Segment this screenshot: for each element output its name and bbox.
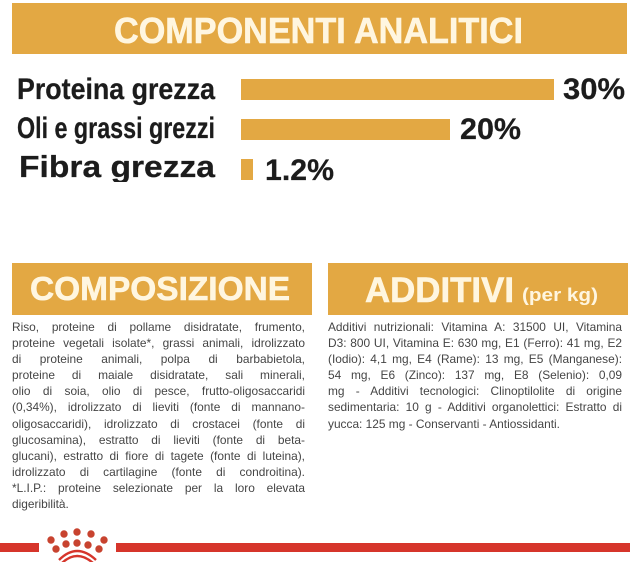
row: fibra grezza: Fibra grezza: [19, 149, 216, 184]
panel: composizione header: [12, 263, 312, 315]
text block: additivi: sedimentaria: 10 g - Additivi organolettici: Estratto di: [328, 400, 622, 414]
text block: composizione: Riso, proteine di pollame disidratate, frumento,: [12, 320, 305, 334]
panel: additivi header: [328, 263, 628, 315]
heading note: per kg: (per kg): [522, 285, 598, 305]
title: componenti analitici: COMPONENTI ANALITICI: [114, 10, 523, 51]
text block: composizione: idrolizzato di cartilagine (fonte di condroitina).: [12, 465, 305, 479]
text block: additivi: (Iodio): 4,1 mg, E4 (Rame): 13 mg, E5 (Manganese):: [328, 352, 622, 366]
text block: additivi: 54 mg, E6 (Zinco): 137 mg, E8 (Selenio): 0,09: [328, 368, 622, 382]
text block: composizione: glucani), estratto di fiore di tagete (fonte di luteina),: [12, 449, 305, 463]
text block: composizione: glucosamina), estratto di lieviti (fonte di beta-: [12, 433, 305, 447]
panel: componenti analitici header: [12, 3, 627, 54]
text block: composizione: [12, 320, 305, 511]
text block: composizione: oligosaccaridi), idrolizzato di crostacei (fonte di: [12, 417, 305, 431]
row: proteina grezza: 30%: [563, 73, 625, 106]
text block: composizione: digeribilità.: [12, 497, 69, 511]
bar chart: analytical components: [17, 73, 625, 187]
text block: additivi: [328, 320, 622, 431]
text block: composizione: proteine vegetali isolate*, grassi animali, idrolizzato: [12, 336, 305, 350]
row: fibra grezza: [21, 154, 334, 182]
row: oli e grassi grezzi: 20%: [460, 113, 521, 146]
row: fibra grezza: 1.2%: [265, 154, 334, 187]
heading: additivi: ADDITIVI: [365, 271, 514, 310]
row: oli e grassi grezzi: [17, 112, 521, 146]
text block: composizione: *L.I.P.: proteine selezionate per la loro elevata: [12, 481, 305, 495]
text block: additivi: Additivi nutrizionali: Vitamina A: 31500 UI, Vitamina: [328, 320, 622, 334]
text block: additivi: mg - Additivi tecnologici: Clinoptilolite di origine: [328, 384, 622, 398]
row: oli e grassi grezzi: Oli e grassi grezzi: [17, 112, 215, 145]
text block: additivi: D3: 800 UI, Vitamina E: 630 mg, E1 (Ferro): 41 mg, E2: [328, 336, 622, 350]
row: proteina grezza: Proteina grezza: [17, 73, 215, 106]
text block: composizione: di proteine animali, polpa di barbabietola,: [12, 352, 305, 366]
text block: composizione: proteine di maiale disidratate, sali minerali,: [12, 368, 305, 382]
footer red line left: [0, 543, 39, 552]
heading: composizione: COMPOSIZIONE: [30, 270, 290, 307]
text block: composizione: olio di soia, olio di pesce, frutto-oligosaccaridi: [12, 384, 305, 398]
text block: additivi: yucca: 125 mg - Conservanti - Antiossidanti.: [328, 417, 560, 431]
row: proteina grezza: [17, 73, 625, 106]
text block: composizione: (0,34%), idrolizzato di lieviti (fonte di mannano-: [12, 400, 305, 414]
icon: royal canin crown: [47, 528, 108, 562]
footer red line right: [116, 543, 630, 552]
